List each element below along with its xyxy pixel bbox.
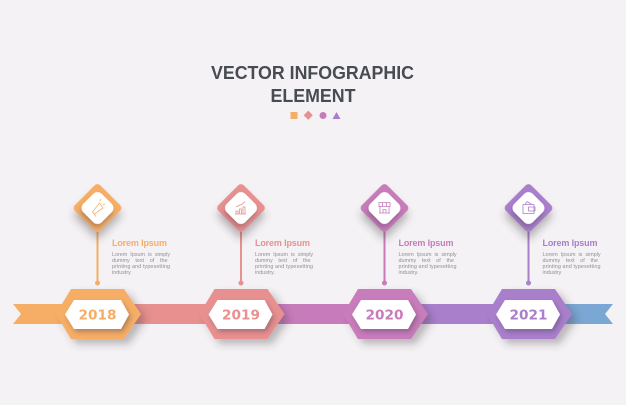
text block 2020: Lorem Ipsum is simply [398,252,457,258]
icon: growth chart [235,202,246,214]
connector line 2018 [95,230,100,286]
text block 2021: Lorem Ipsum is simply [542,252,601,258]
text block 2018: Lorem Ipsum [112,238,167,248]
text block 2018: dummy text of the [112,258,167,264]
milestone 2019 [200,183,313,339]
milestone 2020 [343,183,457,339]
connector line 2020 [382,230,387,286]
year hexagon 2021 [487,289,572,339]
text block 2020: Lorem Ipsum [398,238,454,248]
icon: wallet [523,202,535,214]
text block 2020: printing and typesetting [398,264,456,270]
text block 2018 [112,238,170,276]
year hexagon 2021: 2021 [510,308,548,324]
text block 2018: printing and typesetting [112,264,170,270]
text block 2019: Lorem Ipsum [255,238,310,248]
text block 2021: printing and typesetting [542,264,600,270]
text block 2019: dummy text of the [255,258,310,264]
icon: megaphone [92,199,105,216]
connector line 2021 [526,230,531,286]
milestone 2018 [56,183,170,339]
year hexagon 2020: 2020 [366,308,404,324]
year hexagon 2018 [56,289,141,339]
year hexagon 2019 [200,289,284,339]
text block 2020: dummy text of the [398,258,454,264]
text block 2019: industry. [255,270,275,276]
text block 2021: Lorem Ipsum [542,238,598,248]
text block 2020 [398,238,457,276]
year hexagon 2020 [343,289,428,339]
diamond icon badge 2019 [216,183,266,233]
title: VECTOR INFOGRAPHIC [211,63,414,83]
decorative shape row [290,111,340,120]
year hexagon 2018: 2018 [78,308,116,324]
icon: storefront [379,202,390,213]
connector line 2019 [238,230,244,286]
milestone 2021 [487,183,601,339]
text block 2019: Lorem Ipsum is simply [255,252,313,258]
year hexagon 2019: 2019 [222,308,260,324]
text block 2018: Lorem Ipsum is simply [112,252,170,258]
diamond icon badge 2018 [72,183,123,233]
text block 2019 [255,238,313,276]
text block 2021: industry [542,270,562,276]
title: ELEMENT [270,86,356,106]
text block 2021: dummy text of the [542,258,598,264]
timeline ribbon [13,304,613,324]
text block 2019: printing and typesetting [255,264,313,270]
text block 2020: industry. [398,270,418,276]
title [211,63,414,106]
text block 2021 [542,238,601,276]
diamond icon badge 2020 [359,183,410,233]
diamond icon badge 2021 [503,183,554,233]
text block 2018: industry [112,270,131,276]
